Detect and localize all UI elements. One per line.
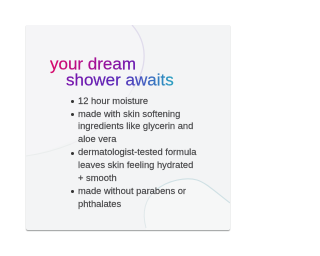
panel: card background [26, 25, 230, 230]
text: hydrated: leaves skin feeling hydrated [78, 160, 193, 170]
text: moisture: 12 hour moisture [78, 96, 148, 106]
bullet 1 [70, 100, 74, 103]
bullet 2 [70, 113, 74, 116]
text: dermatologist: dermatologist-tested formula [78, 147, 196, 157]
text: glycerin: ingredients like glycerin and [78, 121, 193, 131]
title line 1: your dream [50, 54, 136, 74]
bullet 3 [70, 152, 74, 155]
text: phthalates: phthalates [78, 198, 121, 208]
text: skin softening: made with skin softening [78, 108, 180, 118]
bubbles decoration [26, 25, 230, 230]
title line 2: shower awaits [66, 70, 174, 90]
text: parabens: made without parabens or [78, 186, 186, 196]
text: aloe vera: aloe vera [78, 134, 116, 144]
text: smooth: + smooth [78, 173, 117, 183]
title [50, 54, 174, 90]
bullet list [71, 96, 196, 210]
bullet 4 [70, 190, 74, 193]
